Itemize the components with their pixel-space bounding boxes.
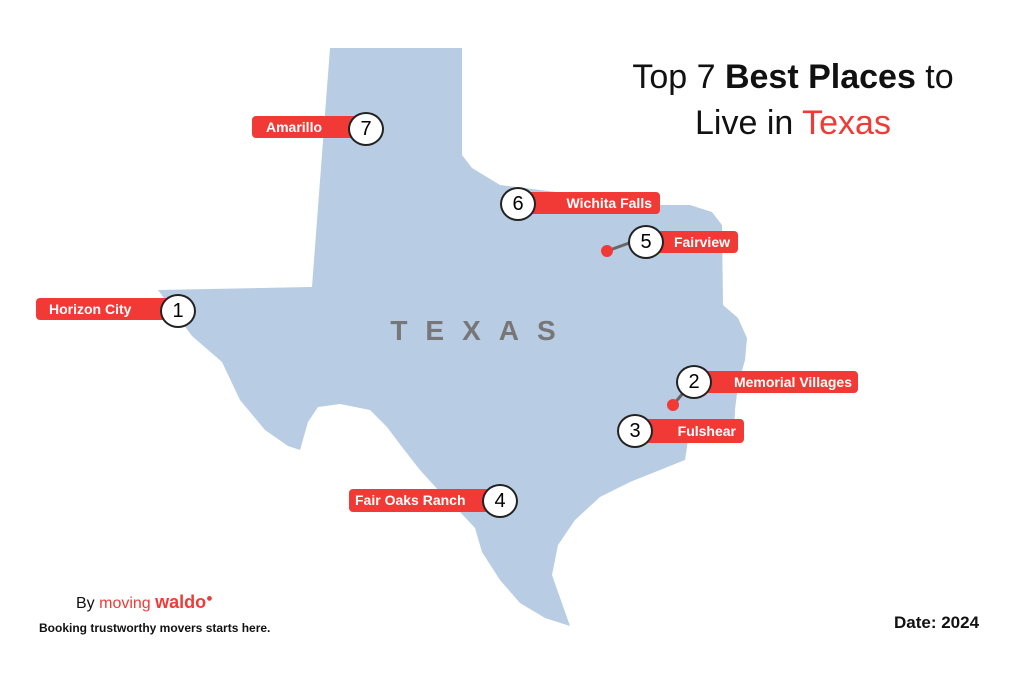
- marker 5 Fairview: Fairview: [674, 234, 730, 250]
- marker 1 Horizon City: Horizon City: [49, 301, 131, 317]
- texas shape: [158, 48, 747, 626]
- marker 6 Wichita Falls: [500, 187, 660, 221]
- marker 7 Amarillo: Amarillo: [266, 119, 322, 135]
- marker 6 Wichita Falls: 6: [512, 193, 524, 215]
- marker 7 Amarillo: 7: [360, 118, 372, 140]
- date: Date: 2024: [894, 613, 979, 632]
- marker 6 Wichita Falls: Wichita Falls: [567, 195, 652, 211]
- marker 2 Memorial Villages: Memorial Villages: [734, 374, 852, 390]
- marker 4 Fair Oaks Ranch: [349, 484, 518, 518]
- map label: TEXAS: TEXAS: [390, 315, 574, 346]
- marker 1 Horizon City: [36, 294, 196, 328]
- marker 3 Fulshear: [617, 414, 744, 448]
- marker 7 Amarillo: [252, 112, 384, 146]
- connector 5: [601, 242, 632, 257]
- title: [632, 58, 954, 142]
- brand logo: By moving waldo●: [76, 592, 213, 612]
- connector 2: [667, 392, 684, 411]
- marker 3 Fulshear: Fulshear: [678, 423, 736, 439]
- title: Live in Texas: [695, 104, 891, 142]
- marker 5 Fairview: [628, 225, 738, 259]
- tagline: Booking trustworthy movers starts here.: [39, 621, 270, 635]
- marker 1 Horizon City: 1: [172, 300, 184, 322]
- marker 2 Memorial Villages: [676, 365, 858, 399]
- marker 5 Fairview: 5: [640, 231, 652, 253]
- marker 2 Memorial Villages: 2: [688, 371, 700, 393]
- marker 4 Fair Oaks Ranch: 4: [494, 490, 506, 512]
- title: Top 7 Best Places to: [632, 58, 954, 96]
- marker 3 Fulshear: 3: [629, 420, 641, 442]
- marker 4 Fair Oaks Ranch: Fair Oaks Ranch: [355, 492, 466, 508]
